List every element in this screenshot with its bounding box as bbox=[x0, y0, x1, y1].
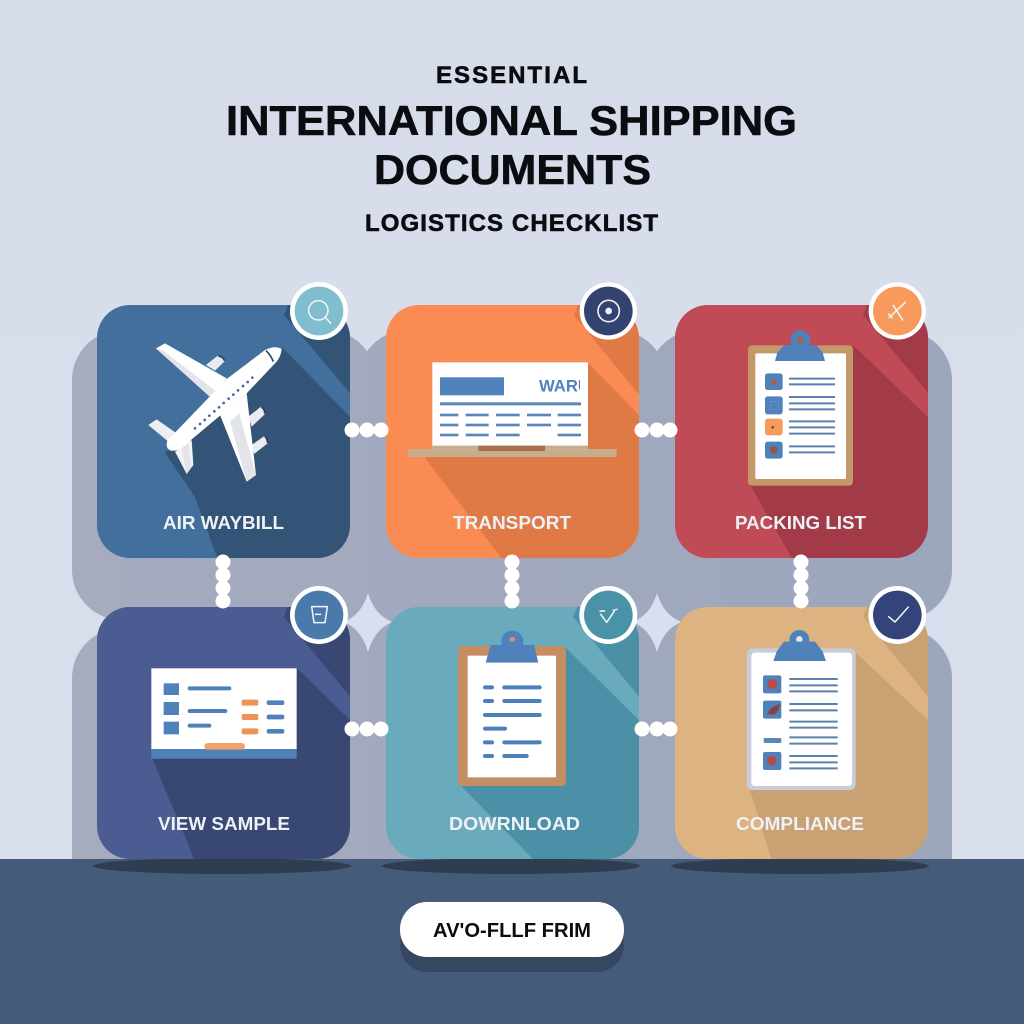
heading line one: INTERNATIONAL SHIPPING bbox=[226, 97, 797, 144]
panel: compliance bbox=[675, 586, 930, 861]
icon: airplane bbox=[148, 343, 282, 482]
label: packing list: PACKING LIST bbox=[735, 513, 866, 533]
title block bbox=[226, 62, 797, 237]
badge: search bbox=[290, 282, 348, 340]
panel: air waybill bbox=[97, 282, 352, 560]
subtitle: LOGISTICS CHECKLIST bbox=[365, 210, 658, 237]
label: compliance: COMPLIANCE bbox=[736, 814, 864, 834]
label: download: DOWRNLOAD bbox=[449, 814, 580, 834]
connectors: white dots between cards bbox=[216, 422, 808, 736]
icon: clipboard document bbox=[458, 631, 566, 786]
icon: transport document bbox=[408, 362, 617, 457]
backdrop: grey rounded panels behind the cards bbox=[72, 330, 952, 928]
badge: target bbox=[580, 282, 637, 340]
card ground shadows bbox=[93, 858, 929, 874]
heading line two: DOCUMENTS bbox=[374, 146, 651, 193]
floor band bbox=[0, 859, 1024, 1024]
icon: transport document: WARU bbox=[539, 376, 590, 395]
icon: clipboard checklist bbox=[748, 330, 853, 486]
badge: check with dashes bbox=[579, 586, 637, 644]
eyebrow: essential: ESSENTIAL bbox=[436, 62, 587, 89]
badge: small plane bbox=[869, 282, 926, 340]
panel: view sample bbox=[97, 586, 352, 861]
panel: packing list bbox=[675, 282, 930, 560]
badge: cup bbox=[290, 586, 348, 644]
button: AV'O-FLLF FRIM bbox=[433, 920, 591, 942]
badge: check mark bbox=[868, 586, 926, 644]
label: air waybill: AIR WAYBILL bbox=[163, 513, 284, 533]
panel: transport bbox=[386, 282, 641, 560]
panel: download bbox=[386, 586, 641, 861]
button bbox=[400, 902, 624, 972]
label: transport: TRANSPORT bbox=[453, 513, 571, 533]
icon: sample document bbox=[151, 668, 297, 759]
icon: compliance clipboard bbox=[747, 630, 856, 790]
label: view sample: VIEW SAMPLE bbox=[158, 814, 290, 834]
